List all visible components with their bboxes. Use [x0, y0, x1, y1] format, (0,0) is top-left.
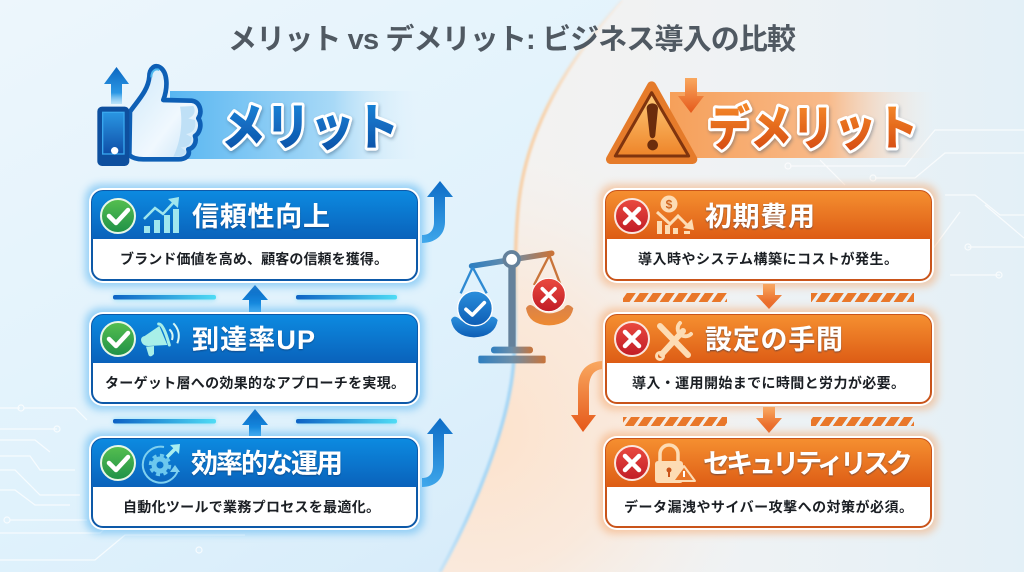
card title: 初期費用 — [705, 202, 815, 232]
icon: down arrow — [678, 78, 704, 113]
icon: wrench and screwdriver — [656, 323, 691, 360]
icon: gear with arrows — [143, 444, 180, 483]
icon: growth chart — [144, 197, 179, 233]
demerit header — [611, 78, 934, 159]
demerit connectors — [623, 284, 914, 433]
card title: 到達率UP — [192, 325, 315, 355]
card text: ターゲット層への効果的なアプローチを実現。 — [105, 375, 405, 391]
card title: 設定の手間 — [705, 325, 843, 355]
icon: up arrow — [104, 67, 129, 104]
card text: データ漏洩やサイバー攻撃への対策が必須。 — [624, 499, 913, 515]
icon: check — [101, 322, 135, 356]
icon: check — [101, 446, 135, 480]
card: 信頼性向上 — [85, 184, 424, 287]
icon: warning triangle — [611, 86, 693, 159]
merit header — [97, 66, 422, 166]
title: メリット vs デメリット: ビジネス導入の比較 — [228, 22, 796, 56]
scale icon — [451, 252, 573, 363]
icon: cross — [615, 446, 649, 480]
icon: thumbs up — [97, 66, 200, 166]
card title: セキュリティリスク — [703, 449, 913, 479]
arrow: side up 2 — [422, 418, 453, 487]
card text: 導入・運用開始までに時間と労力が必要。 — [632, 375, 905, 391]
card: セキュリティリスク — [599, 432, 938, 534]
icon: cross — [615, 199, 649, 233]
card: 効率的な運用 — [85, 432, 424, 534]
demerit ribbon — [670, 92, 934, 158]
card: 到達率UP — [85, 308, 424, 410]
icon: falling cost: $ — [666, 198, 673, 212]
card text: ブランド価値を高め、顧客の信頼を獲得。 — [120, 251, 388, 267]
icon: check — [101, 199, 135, 233]
card text: 導入時やシステム構築にコストが発生。 — [638, 251, 898, 267]
arrow: side up 1 — [422, 181, 453, 243]
demerit heading: デメリット — [708, 102, 918, 156]
icon: falling cost — [657, 196, 694, 234]
card: 設定の手間 — [599, 308, 938, 410]
merit ribbon — [170, 91, 422, 159]
card title: 信頼性向上 — [192, 202, 330, 232]
icon: megaphone — [141, 323, 179, 356]
card title: 効率的な運用 — [191, 449, 343, 479]
card: 初期費用 — [599, 184, 938, 287]
arrow: side down — [571, 361, 602, 432]
card text: 自動化ツールで業務プロセスを最適化。 — [123, 499, 380, 515]
merit connectors — [113, 285, 397, 436]
icon: cross — [615, 322, 649, 356]
merit heading: メリット — [221, 100, 399, 156]
icon: lock with warning — [655, 445, 695, 483]
